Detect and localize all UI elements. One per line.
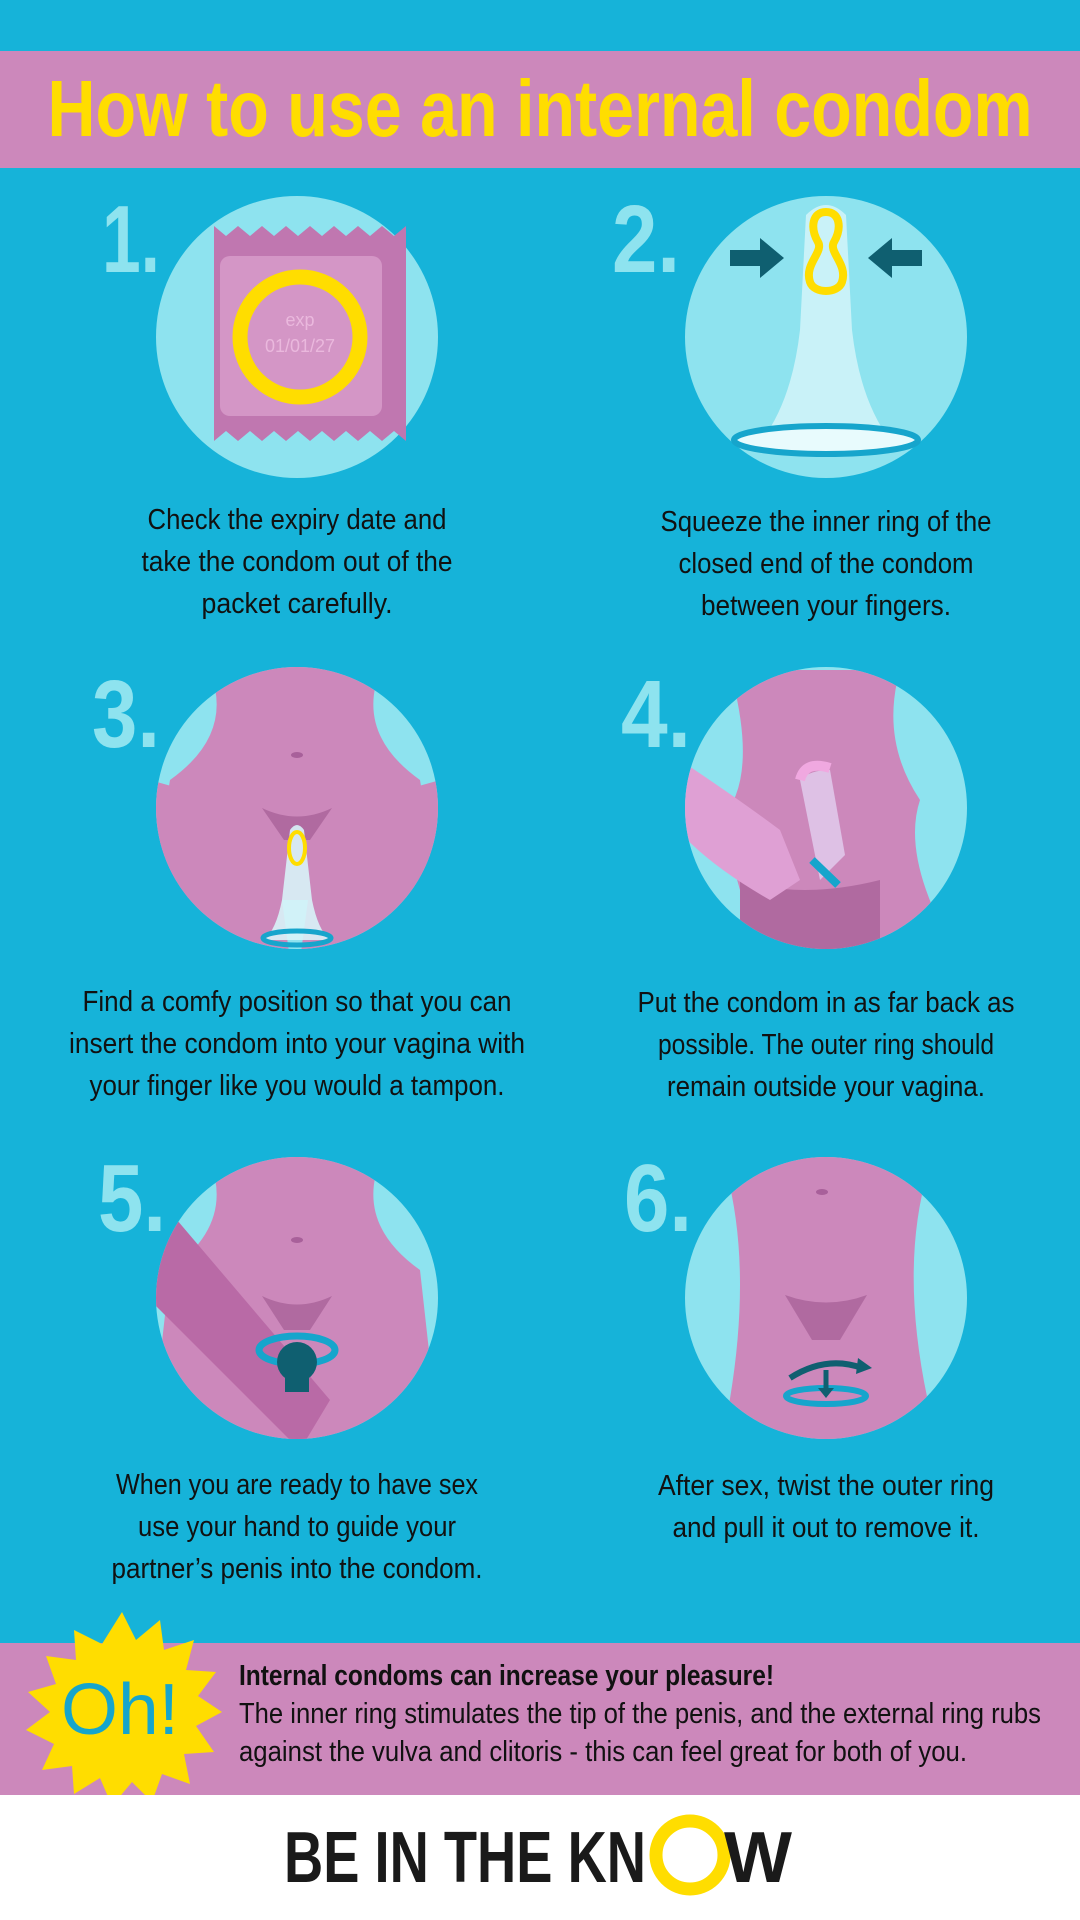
logo: W xyxy=(724,1818,792,1898)
footer xyxy=(0,1795,1080,1920)
step numbers: 3. xyxy=(92,661,160,768)
text step 3: Find a comfy position so that you can xyxy=(82,986,512,1018)
step numbers: 2. xyxy=(612,186,680,293)
text step 6 xyxy=(658,1470,994,1544)
icon: packet step 1 xyxy=(156,196,438,478)
text step 5: partner’s penis into the condom. xyxy=(112,1553,482,1585)
tip text: Internal condoms can increase your pleasure! xyxy=(239,1660,774,1692)
step texts xyxy=(69,504,1014,1585)
icon: insert step 3 xyxy=(150,660,440,960)
text step 5 xyxy=(112,1469,482,1585)
text step 6: and pull it out to remove it. xyxy=(672,1512,980,1544)
icon: squeeze step 2 xyxy=(685,196,967,478)
text step 4 xyxy=(638,987,1014,1103)
text step 6: After sex, twist the outer ring xyxy=(658,1470,994,1502)
tip text: against the vulva and clitoris - this can feel great for both of you. xyxy=(239,1736,967,1768)
text step 3: your finger like you would a tampon. xyxy=(90,1070,504,1102)
step numbers: 4. xyxy=(621,661,691,768)
text step 3 xyxy=(69,986,525,1102)
step numbers: 6. xyxy=(624,1145,692,1252)
step numbers: 1. xyxy=(102,186,160,293)
icon: packet step 1: 01/01/27 xyxy=(265,336,335,356)
text step 2: closed end of the condom xyxy=(678,548,974,580)
logo: BE IN THE KN xyxy=(284,1818,646,1898)
icon: packet step 1: exp xyxy=(285,310,315,330)
text step 1: take the condom out of the xyxy=(142,546,452,578)
tip text xyxy=(239,1660,1041,1768)
text step 1 xyxy=(142,504,452,620)
icon: remove step 6 xyxy=(685,1150,967,1450)
text step 2 xyxy=(660,506,992,622)
text step 4: remain outside your vagina. xyxy=(667,1071,985,1103)
text step 2: Squeeze the inner ring of the xyxy=(660,506,992,538)
text step 5: When you are ready to have sex xyxy=(116,1469,478,1501)
step numbers: 5. xyxy=(98,1145,166,1252)
text step 1: packet carefully. xyxy=(202,588,392,620)
text step 3: insert the condom into your vagina with xyxy=(69,1028,525,1060)
icon: Oh starburst xyxy=(26,1612,222,1806)
text step 5: use your hand to guide your xyxy=(138,1511,456,1543)
text step 2: between your fingers. xyxy=(701,590,951,622)
panel: pleasure tip xyxy=(0,1612,1080,1806)
icon: Oh starburst: Oh! xyxy=(61,1670,179,1750)
text step 4: Put the condom in as far back as xyxy=(638,987,1014,1019)
icon: insert deeper step 4 xyxy=(670,667,967,960)
text step 4: possible. The outer ring should xyxy=(658,1029,994,1061)
text step 1: Check the expiry date and xyxy=(148,504,446,536)
step numbers xyxy=(92,186,692,1252)
title banner xyxy=(0,51,1080,168)
icon: guide step 5 xyxy=(150,1150,440,1450)
